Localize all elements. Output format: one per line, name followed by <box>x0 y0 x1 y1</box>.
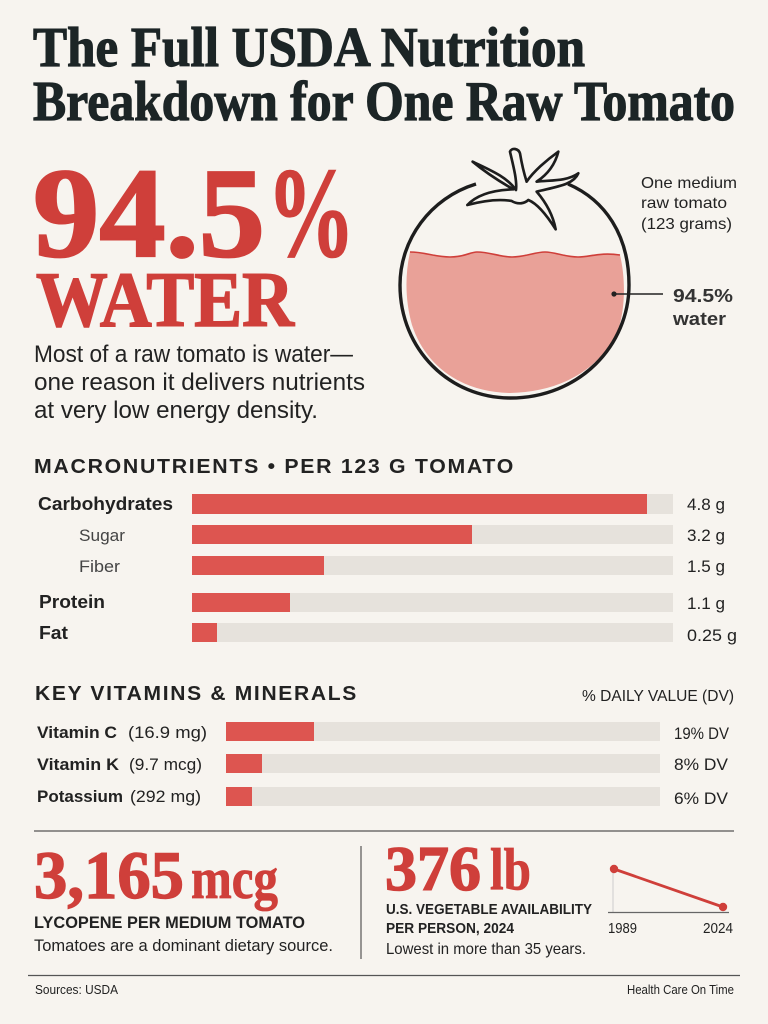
row: potassium: (292 mg) <box>130 787 201 806</box>
row: fiber: Fiber <box>79 557 120 576</box>
row: vitamin K: Vitamin K <box>37 755 120 774</box>
line chart: 1989 to 2024: 1989 <box>608 921 637 937</box>
row: vitamin K: (9.7 mcg) <box>129 755 202 774</box>
water label <box>672 285 733 329</box>
hero stat: 94.5% water: % <box>267 142 355 284</box>
row: vitamin K: 8% DV <box>674 755 729 774</box>
tomato water diagram <box>400 149 663 398</box>
row: vitamin C <box>37 722 730 743</box>
tomato size label: (123 grams) <box>641 216 732 233</box>
row: fat: 0.25 g <box>687 626 737 645</box>
title <box>33 17 735 133</box>
water line <box>410 252 620 257</box>
source note: Sources: USDA <box>35 983 119 997</box>
brand credit: Health Care On Time <box>627 983 734 997</box>
panel: macronutrients <box>34 456 737 645</box>
stat: lycopene: mcg <box>191 846 278 911</box>
hero stat: 94.5% water: WATER <box>36 256 296 343</box>
hero description: one reason it delivers nutrients <box>34 369 365 396</box>
row: fiber <box>79 556 725 576</box>
vitamins heading: KEY VITAMINS & MINERALS <box>35 683 358 705</box>
stat: vegetable availability: U.S. VEGETABLE AVAILABILITY <box>386 902 592 918</box>
stat: vegetable availability <box>385 833 592 958</box>
row: vitamin C: (16.9 mg) <box>128 723 207 742</box>
water label: 94.5% <box>673 285 733 306</box>
tomato stem and calyx <box>467 149 578 229</box>
row: vitamin C: Vitamin C <box>37 723 117 742</box>
hero description: Most of a raw tomato is water— <box>34 341 353 368</box>
stat: lycopene: LYCOPENE PER MEDIUM TOMATO <box>34 914 305 932</box>
macronutrients heading: MACRONUTRIENTS • PER 123 G TOMATO <box>34 456 515 478</box>
tomato size label: raw tomato <box>641 195 727 212</box>
water label: water <box>672 308 726 329</box>
row: fiber: 1.5 g <box>687 557 725 576</box>
stat: lycopene <box>34 837 333 955</box>
row: carbohydrates <box>38 494 725 514</box>
tomato size label: One medium <box>641 175 737 192</box>
row: protein <box>39 592 725 613</box>
leader line <box>611 291 663 297</box>
row: potassium: 6% DV <box>674 789 729 808</box>
row: vitamin C: 19% DV <box>674 724 730 743</box>
line chart: 1989 to 2024 <box>608 865 733 937</box>
row: fat: Fat <box>39 623 68 643</box>
hero description <box>34 341 365 424</box>
panel: vitamins and minerals <box>35 683 734 808</box>
stat: vegetable availability: 376 <box>385 833 481 904</box>
row: sugar: 3.2 g <box>687 526 725 545</box>
row: sugar <box>79 525 725 545</box>
stat: vegetable availability: Lowest in more than 35 years. <box>386 941 586 958</box>
row: potassium <box>37 787 729 808</box>
row: sugar: Sugar <box>79 526 125 545</box>
water fill <box>406 252 624 393</box>
line chart: 1989 to 2024: 2024 <box>703 921 733 937</box>
hero stat: 94.5% water: 94.5 <box>33 142 265 284</box>
row: potassium: Potassium <box>37 787 123 806</box>
title: The Full USDA Nutrition <box>33 17 585 79</box>
stat: vegetable availability: lb <box>490 836 531 902</box>
row: fat <box>39 623 737 645</box>
row: vitamin K <box>37 754 729 774</box>
row: protein: 1.1 g <box>687 594 725 613</box>
hero stat: 94.5% water <box>33 142 355 343</box>
stat: lycopene: Tomatoes are a dominant dietary source. <box>34 936 333 955</box>
row: carbohydrates: Carbohydrates <box>38 494 173 514</box>
tomato size label <box>641 175 737 233</box>
stat: vegetable availability: PER PERSON, 2024 <box>386 921 514 937</box>
row: protein: Protein <box>39 592 105 612</box>
row: carbohydrates: 4.8 g <box>687 495 725 514</box>
stat: lycopene: 3,165 <box>34 837 184 913</box>
tomato outline <box>400 184 629 398</box>
hero description: at very low energy density. <box>34 397 318 424</box>
daily value note: % DAILY VALUE (DV) <box>582 688 734 705</box>
